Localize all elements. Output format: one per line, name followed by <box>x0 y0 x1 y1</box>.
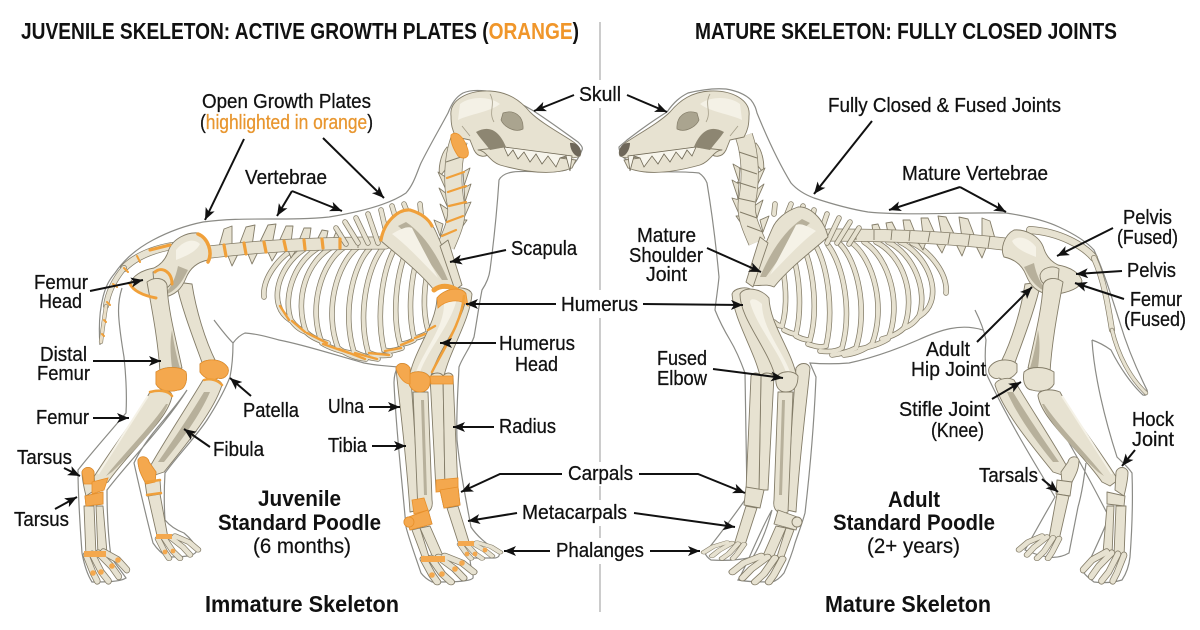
label: Metacarpals: Metacarpals <box>522 501 627 524</box>
arrow: carpals left <box>461 474 562 492</box>
label: Tibia: Tibia <box>328 434 368 457</box>
label: Fibula: Fibula <box>213 438 265 461</box>
title: mature skeleton: MATURE SKELETON: FULLY CLOSED JOINTS <box>695 18 1117 44</box>
growth plates in orange <box>82 133 487 578</box>
arrow: scapula <box>450 250 506 262</box>
arrows: vertebrae <box>277 191 342 216</box>
caption: adult poodle: Standard Poodle <box>833 510 995 535</box>
caption: juvenile poodle: (6 months) <box>253 535 351 558</box>
label: Fused Elbow: Elbow <box>657 367 707 390</box>
arrow: femur fused <box>1075 283 1124 299</box>
scapula <box>746 207 828 287</box>
arrow: skull left <box>534 95 574 111</box>
label: Fused Elbow: Fused <box>657 347 707 370</box>
body outline: adult underside <box>619 112 1132 583</box>
arrow: tarsus lower <box>55 497 77 509</box>
label: Humerus Head: Head <box>515 353 558 376</box>
label: Fully Closed and Fused Joints: Fully Closed & Fused Joints <box>828 94 1061 117</box>
thoracic spines <box>774 204 859 244</box>
far foreleg <box>426 288 500 558</box>
label: Distal Femur: Distal <box>40 343 87 366</box>
body outline: juvenile hind legs <box>78 288 233 582</box>
label: Humerus Head <box>499 332 575 376</box>
lumbar spine <box>210 224 385 266</box>
label: Stifle Joint (Knee): (Knee) <box>931 419 984 442</box>
arrow: hock joint <box>1122 450 1135 466</box>
pelvis <box>1002 230 1082 295</box>
label: Mature Shoulder Joint: Mature <box>637 224 696 247</box>
label: Ulna: Ulna <box>328 395 365 418</box>
caption: Mature Skeleton: Mature Skeleton <box>825 591 991 617</box>
label: Open Growth Plates <box>200 90 373 134</box>
near foreleg <box>732 289 810 582</box>
label: Phalanges: Phalanges <box>556 539 644 562</box>
label: Scapula: Scapula <box>511 237 578 260</box>
arrow: distal femur <box>93 360 161 362</box>
label: Tarsals: Tarsals <box>979 464 1038 487</box>
arrow: open plates left <box>205 139 244 220</box>
arrow: humerus right <box>643 304 743 305</box>
caption: adult poodle <box>833 487 995 558</box>
label: Femur Head: Head <box>39 290 82 313</box>
arrow: fully closed <box>814 121 872 194</box>
arrow: femur <box>93 417 129 419</box>
arrow: humerus head <box>440 342 496 344</box>
label: Femur (Fused): Femur <box>1130 288 1182 311</box>
label: Pelvis (Fused): Pelvis <box>1123 206 1172 229</box>
panel: juvenile poodle skeleton <box>78 90 582 582</box>
arrow: radius <box>453 426 494 428</box>
arrow: phalanges right <box>650 550 700 552</box>
near hind leg <box>1023 278 1128 581</box>
arrow: tarsus upper <box>64 468 80 476</box>
arrow: stifle joint <box>992 382 1021 399</box>
label: Hock Joint <box>1132 408 1175 451</box>
caption: adult poodle: Adult <box>888 487 941 512</box>
arrow: humerus left <box>466 303 556 305</box>
label: Fused Elbow <box>657 347 707 390</box>
skull <box>451 91 581 172</box>
label: Stifle Joint (Knee) <box>899 398 990 442</box>
label: Distal Femur <box>37 343 90 385</box>
label: Femur (Fused) <box>1124 288 1186 331</box>
label: Open Growth Plates: (highlighted in orange) <box>200 111 373 134</box>
caption: juvenile poodle: Juvenile <box>258 486 341 511</box>
arrow: patella <box>230 378 251 396</box>
far hind leg <box>138 282 228 558</box>
label: Pelvis: Pelvis <box>1127 259 1176 282</box>
arrow: tibia <box>372 445 406 447</box>
label: Femur Head <box>34 271 88 313</box>
caption: juvenile poodle <box>218 486 381 558</box>
pelvis <box>130 233 210 298</box>
far foreleg <box>704 288 778 558</box>
label: Mature Shoulder Joint: Joint <box>646 263 687 286</box>
caption: juvenile poodle: Standard Poodle <box>218 510 381 535</box>
near hind leg <box>82 278 187 581</box>
title: juvenile skeleton: JUVENILE SKELETON: ACTIVE GROWTH PLATES (ORANGE) <box>21 18 579 44</box>
arrow: metacarpals left <box>468 513 517 521</box>
label: Vertebrae: Vertebrae <box>245 166 327 189</box>
thoracic spines <box>336 204 421 244</box>
label: Mature Shoulder Joint: Shoulder <box>629 244 703 267</box>
label: Pelvis (Fused) <box>1117 206 1178 249</box>
label: Mature Vertebrae: Mature Vertebrae <box>902 162 1048 185</box>
rib cage <box>264 246 436 359</box>
arrow: fused elbow <box>713 369 783 378</box>
arrow: tarsals <box>1042 479 1058 492</box>
arrows: mature vertebrae <box>889 187 1006 212</box>
label: Femur Head: Femur <box>34 271 88 294</box>
label: Femur: Femur <box>36 406 89 429</box>
arrow: phalanges left <box>504 550 550 552</box>
near foreleg <box>396 289 474 582</box>
label: Humerus Head: Humerus <box>499 332 575 355</box>
label: Radius: Radius <box>499 415 556 438</box>
skull <box>619 91 749 172</box>
arrow: pelvis fused <box>1057 228 1113 256</box>
body outline: adult <box>667 89 1147 395</box>
arrow: skull right <box>627 95 667 112</box>
label: Adult Hip Joint: Adult <box>926 338 970 361</box>
label: Pelvis (Fused): (Fused) <box>1117 226 1178 249</box>
arrow: pelvis <box>1076 271 1122 274</box>
label: Carpals: Carpals <box>568 462 633 485</box>
arrow: fibula <box>184 429 210 447</box>
arrow: carpals right <box>639 474 745 493</box>
arrow: femur head <box>90 280 143 291</box>
label: Humerus: Humerus <box>561 293 638 316</box>
neck vertebrae <box>434 140 471 246</box>
label: Hock Joint: Hock <box>1132 408 1175 431</box>
label: Tarsus upper: Tarsus <box>17 446 72 469</box>
arrow: metacarpals right <box>634 513 735 527</box>
panel: adult poodle skeleton <box>619 89 1147 583</box>
arrow: open plates right <box>323 138 384 198</box>
label: Stifle Joint (Knee): Stifle Joint <box>899 398 990 421</box>
label: Distal Femur: Femur <box>37 362 90 385</box>
label: Open Growth Plates: Open Growth Plates <box>202 90 371 113</box>
label: Femur (Fused): (Fused) <box>1124 308 1186 331</box>
arrow: adult hip <box>977 287 1032 342</box>
label: Mature Shoulder Joint <box>629 224 703 286</box>
tail <box>1030 230 1146 393</box>
rib cage <box>774 242 946 355</box>
label: Adult Hip Joint <box>911 338 986 381</box>
caption: adult poodle: (2+ years) <box>867 535 960 558</box>
label: Patella: Patella <box>243 399 300 422</box>
lumbar spine <box>829 216 1004 258</box>
label: Tarsus lower: Tarsus <box>14 508 69 531</box>
arrow: mature shoulder <box>707 248 761 272</box>
scapula <box>380 210 462 290</box>
caption: Immature Skeleton: Immature Skeleton <box>205 591 399 617</box>
label: Hock Joint: Joint <box>1132 428 1174 451</box>
neck vertebrae <box>732 136 769 242</box>
tail <box>101 246 172 342</box>
arrow: ulna <box>369 406 400 408</box>
label: Adult Hip Joint: Hip Joint <box>911 358 986 381</box>
body outline: juvenile <box>99 90 582 582</box>
label: Skull: Skull <box>579 83 621 106</box>
far hind leg <box>989 282 1079 558</box>
